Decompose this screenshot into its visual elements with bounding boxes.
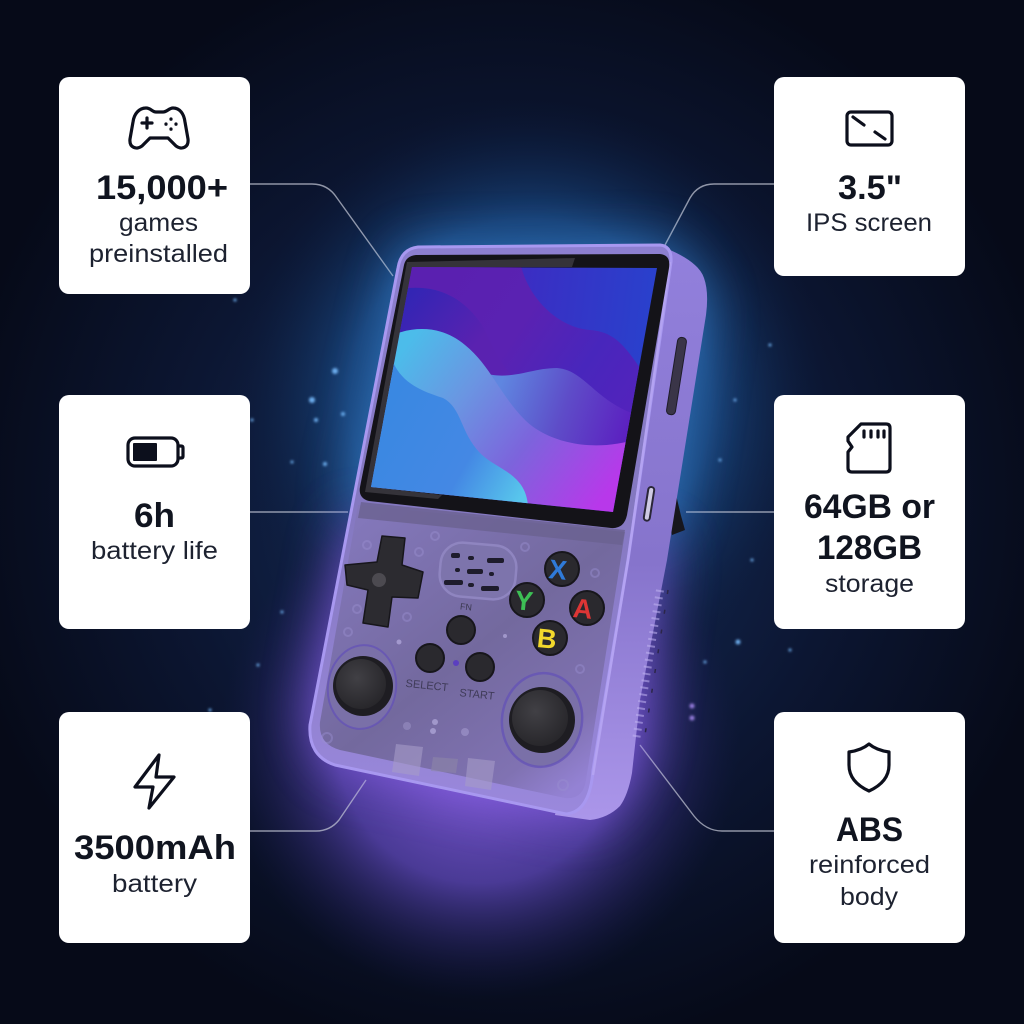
device side shell: [555, 246, 707, 820]
card: screen: 3.5": [838, 169, 902, 207]
card: games: games: [119, 209, 198, 237]
card: storage: storage: [825, 570, 914, 598]
volume buttons: [666, 337, 687, 415]
right analog stick: [496, 668, 588, 772]
card: screen: [774, 77, 965, 276]
control panel inset: [320, 505, 625, 798]
card: battery life: [59, 395, 250, 629]
icon: gamepad: [130, 108, 188, 148]
d-pad: [345, 536, 423, 627]
translucent light dots: [396, 634, 507, 736]
face buttons: X: [547, 554, 568, 586]
control panel details: [322, 502, 625, 790]
face buttons: Y: [513, 585, 534, 617]
left analog stick: [322, 641, 402, 733]
card: games: preinstalled: [89, 240, 228, 268]
connector lines: [250, 184, 774, 831]
screen bezel: [360, 254, 669, 528]
small buttons: SELECT: [405, 678, 449, 694]
blue glow behind device: [345, 246, 708, 540]
card: games: [59, 77, 250, 294]
icon: lightning bolt: [135, 755, 174, 808]
face buttons: A: [572, 593, 594, 625]
speaker grille: [438, 541, 518, 601]
card: body: body: [840, 883, 899, 911]
face buttons: B: [536, 623, 558, 655]
card: body: [774, 712, 965, 943]
card: screen: IPS screen: [806, 209, 932, 237]
small buttons: FN: [460, 601, 472, 613]
USB slot: [643, 487, 655, 521]
card: body: ABS: [836, 811, 903, 849]
small buttons: [405, 601, 495, 703]
card: games: 15,000+: [96, 169, 228, 207]
icon: SD card: [848, 424, 890, 472]
screw bosses: [322, 532, 599, 790]
card: storage: 64GB or: [804, 488, 935, 526]
purple glow behind device: [310, 520, 670, 820]
small buttons: START: [459, 687, 495, 703]
icon: battery: [128, 438, 183, 466]
card: body: reinforced: [809, 851, 930, 879]
card: capacity: battery: [112, 870, 198, 898]
bottom ports: [392, 744, 495, 790]
card: battery life: battery life: [91, 537, 218, 565]
side light rail: [593, 262, 670, 775]
icon: shield: [849, 744, 889, 791]
card: capacity: 3500mAh: [74, 829, 236, 867]
card: capacity: [59, 712, 250, 943]
screen wallpaper: [371, 267, 657, 512]
side edge notches: [645, 590, 668, 735]
icon: screen: [847, 112, 892, 145]
face buttons: [510, 552, 604, 655]
card: storage: [774, 395, 965, 629]
side ridges: [636, 590, 660, 740]
rear grip: [664, 470, 685, 535]
background star particles: [208, 298, 792, 720]
device front shell: [310, 245, 671, 814]
handheld console: [310, 245, 707, 820]
card: battery life: 6h: [134, 497, 175, 535]
card: storage: 128GB: [817, 529, 922, 567]
